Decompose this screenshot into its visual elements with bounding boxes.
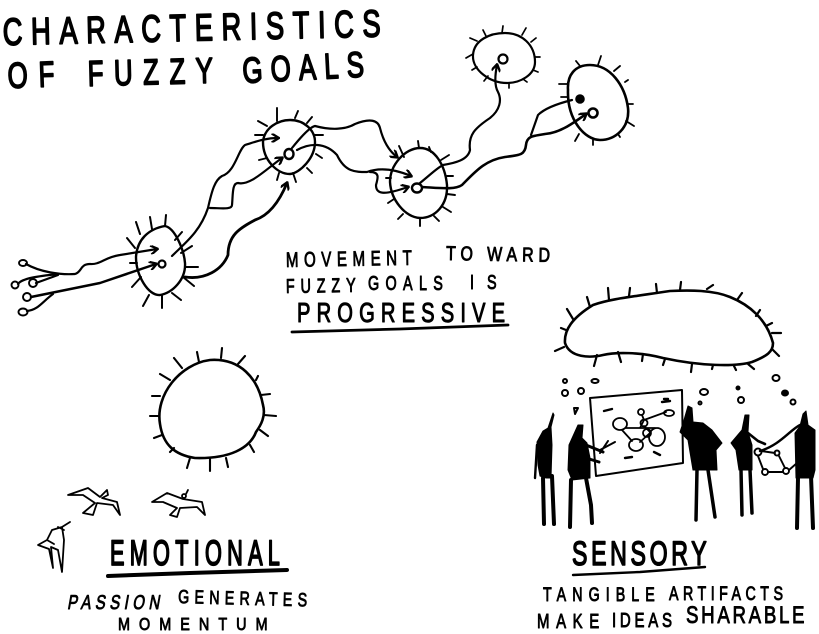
text: tangible artifacts make ideas sharable: MAKE — [537, 610, 599, 633]
circle: goal stage 1 — [127, 215, 198, 308]
caption: progressive: GOALS — [368, 272, 443, 295]
text: tangible artifacts make ideas sharable — [537, 583, 805, 633]
text: passion generates momentum: GENERATES — [178, 586, 307, 611]
title: CHARACTERISTICS — [2, 3, 381, 54]
circle: sun-like goal — [150, 348, 276, 471]
caption: progressive: MOVEMENT — [286, 245, 412, 272]
text: tangible artifacts make ideas sharable: SHARABLE — [686, 602, 805, 629]
starting points — [12, 260, 37, 316]
title: GOALS — [241, 45, 365, 91]
circle: goal stage 4 lower — [559, 56, 634, 145]
panel: progressive path diagram — [12, 26, 634, 316]
heading: sensory: SENSORY — [572, 536, 707, 573]
caption: progressive — [286, 242, 550, 332]
person 5 — [760, 411, 815, 528]
caption: progressive: TO WARD — [446, 242, 550, 266]
person 2 — [568, 425, 615, 527]
shared sketch — [754, 448, 797, 475]
arrows: stage 3 to 4 — [420, 65, 586, 188]
text: tangible artifacts make ideas sharable: IDEAS — [612, 609, 672, 632]
person 1 — [535, 413, 554, 524]
title: FUZZY — [87, 51, 214, 94]
cloud: shared goal — [555, 282, 781, 372]
circle: goal stage 4 upper — [466, 26, 540, 88]
arrows: stage 2 to 3 — [292, 121, 411, 193]
birds — [38, 488, 205, 572]
title — [2, 3, 381, 96]
caption: progressive: IS — [470, 271, 497, 294]
panel: sensory — [535, 282, 815, 633]
text: tangible artifacts make ideas sharable: TANGIBLE — [543, 584, 655, 606]
text: tangible artifacts make ideas sharable: ARTIFACTS — [669, 583, 783, 605]
people — [535, 406, 815, 528]
text: passion generates momentum: PASSION — [66, 591, 162, 613]
caption: progressive: FUZZY — [286, 273, 356, 298]
board with network — [590, 390, 683, 476]
arrows: stage 1 to 2 — [172, 138, 287, 278]
thought bubbles — [562, 375, 796, 414]
caption: progressive: PROGRESSIVE — [297, 298, 505, 329]
text: passion generates momentum: MOMENTUM — [118, 615, 268, 634]
circle: goal stage 2 — [255, 108, 323, 182]
heading: emotional: EMOTIONAL — [110, 535, 280, 573]
arrows: stage 0 to 1 — [18, 249, 166, 311]
title: OF — [7, 54, 55, 96]
text: passion generates momentum — [66, 586, 307, 634]
person 3 — [680, 406, 722, 520]
circle: goal stage 3 — [386, 141, 455, 226]
panel: emotional — [38, 348, 307, 634]
person 4 — [731, 415, 765, 515]
